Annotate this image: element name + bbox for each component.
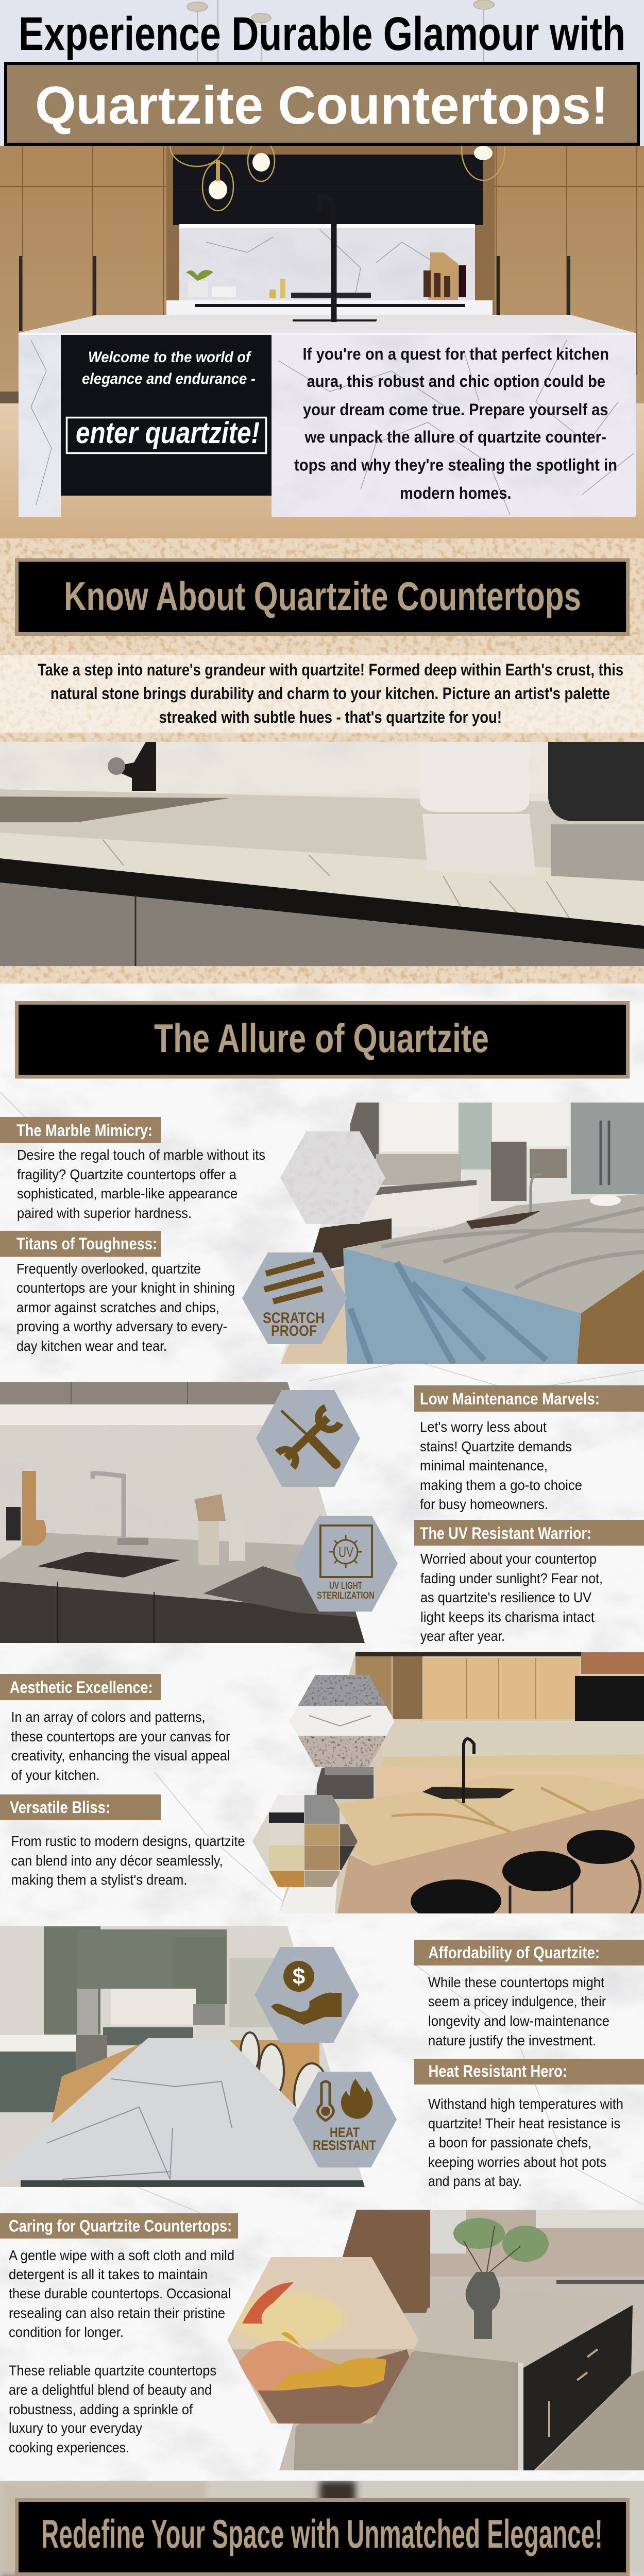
body text: paired with superior hardness. (17, 1205, 192, 1221)
body text: can blend into any décor seamlessly, (11, 1853, 223, 1869)
label (0, 1674, 161, 1700)
vase and plant (453, 2218, 549, 2339)
welcome text: Welcome to the world of (88, 349, 252, 366)
body text: fragility? Quartzite countertops offer a (17, 1166, 236, 1182)
label (0, 1231, 161, 1257)
photo: green kitchen (0, 1926, 365, 2187)
label (0, 2213, 238, 2239)
body text (420, 1551, 603, 1644)
countertop photo (0, 742, 644, 966)
panel: know about quartzite (0, 538, 644, 984)
lower cabinets (0, 2035, 76, 2112)
decor on the back counter (185, 252, 466, 300)
body text (16, 1261, 235, 1354)
title banner (6, 63, 638, 144)
island marble side and front (19, 335, 61, 517)
body text: seem a pricey indulgence, their (428, 1993, 606, 2009)
icon: heat resistant (293, 2072, 397, 2167)
body text: fading under sunlight? Fear not, (420, 1570, 603, 1586)
intro paragraph: aura, this robust and chic option could be (307, 372, 605, 391)
body text: Withstand high temperatures with (428, 2096, 623, 2112)
label (414, 1520, 644, 1546)
marble island top (0, 2038, 365, 2180)
utensils and boards (6, 1471, 245, 1565)
body text (11, 1833, 245, 1888)
body text (428, 2096, 623, 2189)
intro paragraph (294, 345, 617, 502)
body text: From rustic to modern designs, quartzite (11, 1833, 245, 1849)
body text: keeping worries about hot pots (428, 2154, 606, 2170)
icon: scratch proof: PROOF (271, 1323, 317, 1340)
icon: tools (256, 1390, 360, 1487)
label: Low Maintenance Marvels: (420, 1389, 600, 1408)
intro paragraph: your dream come true. Prepare yourself as (303, 400, 608, 419)
icon: uv light (293, 1516, 398, 1612)
body text: these durable countertops. Occasional (9, 2285, 231, 2301)
label: Heat Resistant Hero: (429, 2062, 567, 2080)
dark jug (548, 742, 644, 821)
icon: stone tile grid (252, 1795, 358, 1887)
heading: redefine (16, 2500, 628, 2574)
samples background photo (0, 2481, 644, 2576)
pendant lamps (169, 146, 506, 211)
dark cabinets (523, 2305, 633, 2470)
sink (0, 796, 230, 822)
body text: nature justify the investment. (428, 2032, 596, 2048)
island top (415, 2290, 633, 2361)
section: caring (0, 2213, 238, 2455)
body text (9, 2247, 234, 2455)
kitchen photo (0, 118, 644, 538)
faucet (331, 224, 337, 322)
section: aesthetic excellence (0, 1674, 230, 1783)
body text: Worried about your countertop (420, 1551, 597, 1567)
body text: Frequently overlooked, quartzite (16, 1261, 201, 1277)
label: Affordability of Quartzite: (429, 1943, 600, 1962)
body text: and pans at bay. (428, 2173, 522, 2189)
section: affordability (414, 1940, 644, 2048)
label (414, 1940, 644, 1965)
body text: sophisticated, marble-like appearance (17, 1185, 238, 1201)
body text: light keeps its charisma intact (420, 1609, 595, 1625)
island (335, 1775, 644, 1866)
photo: honey kitchen (279, 1652, 644, 1923)
welcome text: elegance and endurance - (82, 370, 256, 387)
section: low maintenance (414, 1385, 644, 1512)
wood floor (52, 2040, 319, 2123)
hob (204, 1566, 365, 1618)
icon: heat resistant: HEAT (330, 2125, 360, 2140)
stools (411, 1830, 640, 1923)
welcome text (82, 349, 256, 387)
body text: countertops are your knight in shining (16, 1280, 235, 1296)
body text: creativity, enhancing the visual appeal (11, 1748, 230, 1764)
icon: scratch proof (242, 1252, 347, 1344)
body text: Desire the regal touch of marble without its (17, 1147, 265, 1163)
callout: enter quartzite: enter quartzite! (76, 416, 260, 450)
body text (428, 1974, 609, 2048)
body text: as quartzite's resilience to UV (420, 1589, 591, 1605)
body text (17, 1147, 265, 1221)
ceiling pendant mounts (187, 0, 494, 62)
icon: marble sample (280, 1131, 385, 1224)
section: heat resistant (414, 2059, 644, 2189)
icon: stone samples (290, 1675, 395, 1767)
description text: streaked with subtle hues - that's quartzite for you! (159, 708, 502, 726)
label: Versatile Bliss: (10, 1798, 110, 1817)
body text: longevity and low-maintenance (428, 2013, 609, 2029)
background: white marble (0, 984, 644, 2576)
label: Titans of Toughness: (16, 1234, 157, 1253)
heading: the allure (16, 1003, 628, 1077)
body text: making them a stylist's dream. (11, 1872, 188, 1888)
label: The UV Resistant Warrior: (420, 1524, 591, 1543)
section: marble mimicry (0, 1117, 265, 1221)
icon: hand wiping counter (227, 2257, 419, 2424)
section: uv resistant (414, 1520, 644, 1644)
body text: In an array of colors and patterns, (11, 1709, 205, 1725)
chairs (241, 2032, 329, 2130)
island worktop (19, 315, 635, 333)
waterfall side (294, 2351, 518, 2470)
description text (38, 660, 623, 726)
body text: luxury to your everyday (9, 2420, 142, 2436)
body text: cooking experiences. (9, 2439, 129, 2455)
intro paragraph: modern homes. (400, 484, 511, 502)
body text: making them a go-to choice (420, 1477, 582, 1493)
body text: day kitchen wear and tear. (16, 1338, 167, 1354)
marble veins (0, 1092, 644, 2576)
label (414, 2059, 644, 2084)
body text: condition for longer. (9, 2324, 124, 2340)
body text (11, 1709, 230, 1783)
worktop (0, 1533, 365, 1613)
body text: robustness, adding a sprinkle of (9, 2401, 193, 2417)
heading: know about (16, 560, 628, 634)
white jug (420, 742, 529, 812)
icon: affordability (255, 1947, 359, 2043)
body text: Let's worry less about (420, 1419, 547, 1435)
heading: the allure: The Allure of Quartzite (154, 1015, 489, 1061)
body text: While these countertops might (428, 1974, 604, 1990)
panel: hero (0, 0, 644, 538)
label (0, 1794, 161, 1820)
body text: minimal maintenance, (420, 1458, 548, 1473)
body text: stains! Quartzite demands (420, 1438, 572, 1454)
photo: kitchen with marble backsplash (0, 1382, 365, 1643)
body text: A gentle wipe with a soft cloth and mild (9, 2247, 234, 2263)
panel: redefine your space (0, 2481, 644, 2576)
icon: uv light: UV LIGHT (329, 1581, 362, 1591)
faucet (122, 742, 156, 791)
photo: waterfall island (279, 2210, 644, 2470)
body text: proving a worthy adversary to every- (16, 1318, 227, 1334)
icon: heat resistant: RESISTANT (313, 2138, 376, 2153)
body text: for busy homeowners. (420, 1496, 548, 1512)
section: versatile bliss (0, 1794, 245, 1888)
sink (37, 1552, 180, 1578)
banner text: Quartzite Countertops! (35, 76, 608, 135)
body text: armor against scratches and chips, (16, 1299, 219, 1315)
body text: detergent is all it takes to maintain (9, 2266, 208, 2282)
photo: blue quartzite island (280, 1103, 644, 1364)
intro paragraph: tops and why they're stealing the spotlight in (294, 455, 617, 474)
body text: year after year. (420, 1628, 505, 1644)
icon: uv light: STERILIZATION (317, 1590, 375, 1601)
body text: of your kitchen. (11, 1767, 100, 1783)
label: The Marble Mimicry: (16, 1121, 152, 1140)
body text: These reliable quartzite countertops (9, 2363, 216, 2378)
icon: scratch proof: SCRATCH (263, 1310, 325, 1327)
body text (420, 1419, 582, 1512)
icon: affordability: $ (293, 1964, 305, 1989)
label (0, 1117, 161, 1143)
faucet (464, 1739, 474, 1803)
label: Caring for Quartzite Countertops: (9, 2216, 232, 2235)
body text: resealing can also retain their pristine (9, 2305, 225, 2321)
icon: uv light: UV (338, 1544, 353, 1560)
faucet (93, 1473, 124, 1538)
body text: a boon for passionate chefs, (428, 2134, 591, 2150)
body text: are a delightful blend of beauty and (9, 2382, 212, 2398)
intro paragraph: If you're on a quest for that perfect kitchen (303, 345, 609, 363)
label: Aesthetic Excellence: (10, 1678, 152, 1697)
label (414, 1385, 644, 1412)
body text: quartzite! Their heat resistance is (428, 2115, 620, 2131)
body text: these countertops are your canvas for (11, 1728, 230, 1744)
section: titans of toughness (0, 1231, 235, 1354)
intro paragraph: we unpack the allure of quartzite counter- (304, 428, 606, 446)
